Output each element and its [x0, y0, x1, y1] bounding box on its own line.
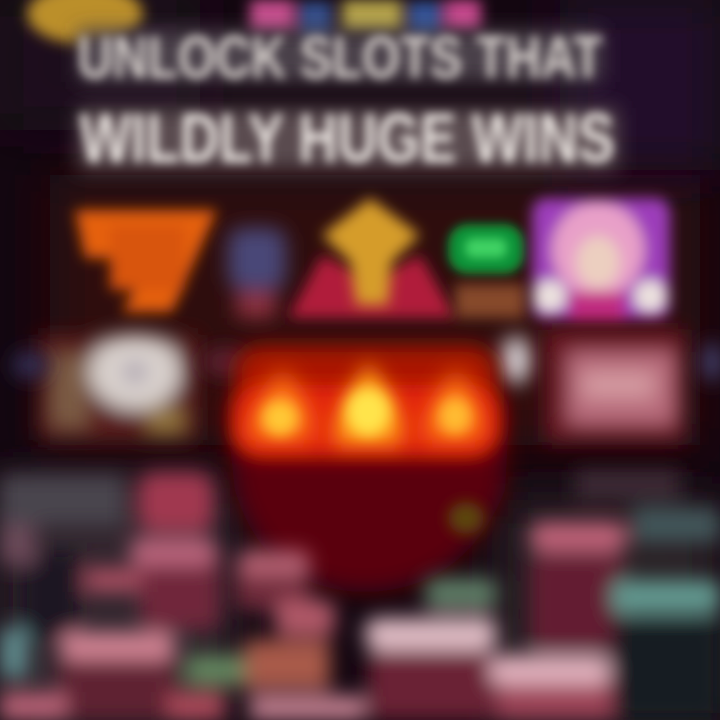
- icon: gold crown and red gems: [288, 198, 456, 318]
- icon: orange seven: [75, 210, 217, 312]
- panel: left slot tile: [38, 334, 198, 440]
- icon: green pill: [448, 224, 525, 318]
- icon: fire cauldron: [225, 345, 510, 592]
- poker chip stacks: [0, 470, 720, 720]
- icon: blue figure: [228, 228, 286, 318]
- title: UNLOCK SLOTS THAT: [78, 24, 602, 91]
- icon: small pale accents: [12, 336, 720, 384]
- top decorative icons: [27, 0, 481, 44]
- title: [78, 24, 618, 177]
- panel: right slot tile: [545, 330, 685, 442]
- icon: pink character tile: [532, 198, 670, 322]
